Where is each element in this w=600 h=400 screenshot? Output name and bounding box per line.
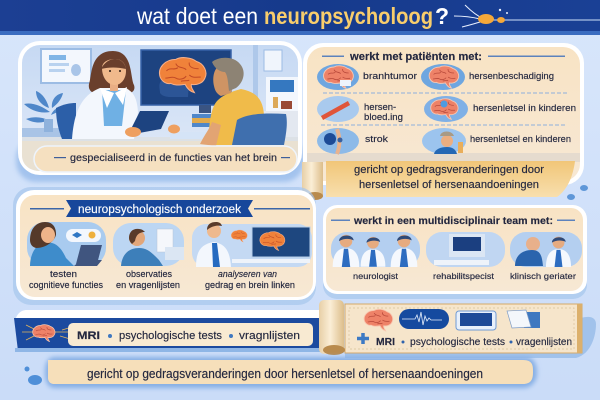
step: cognitive tests xyxy=(27,222,106,290)
banner heading xyxy=(66,200,253,217)
step: analysing behaviour and brain: analyseren van xyxy=(218,269,277,279)
caption: specialised: gespecialiseerd in de functies van het brein xyxy=(70,152,277,164)
scroll banner: focus on behaviour: hersenletsel of hersenaandoeningen xyxy=(359,179,539,191)
scroll: assessment tools xyxy=(319,300,596,358)
scroll banner: focus on behaviour: gericht op gedragsveranderingen door xyxy=(354,164,544,176)
heading: works with patients: werkt met patiënten met: xyxy=(349,51,482,63)
title: wat doet een xyxy=(136,3,258,29)
desk xyxy=(22,137,298,147)
item: brain haemorrhage xyxy=(317,96,403,123)
member: neurologist: neurologist xyxy=(353,271,399,281)
icon: brain xyxy=(364,309,393,331)
title xyxy=(136,3,449,29)
step: analysing behaviour and brain xyxy=(192,222,312,290)
member: rehabilitation specialist: rehabilitspecist xyxy=(433,271,495,281)
panel: multidisciplinary team xyxy=(323,205,587,299)
member: neurologist xyxy=(331,232,420,281)
member: clinical geriatrician xyxy=(510,232,582,281)
item: brain damage xyxy=(421,64,554,90)
icon: plus xyxy=(357,333,369,344)
icon: plant xyxy=(24,91,68,132)
panel: specialised in brain functions xyxy=(16,41,304,182)
icon: papers xyxy=(507,310,540,328)
member: rehabilitation specialist xyxy=(426,232,505,281)
bottom banner: focus statement: gericht op gedragsveranderingen door hersenletsel of hersenaandoeningen xyxy=(87,367,483,381)
header band xyxy=(0,0,600,35)
monitor with brain scan xyxy=(141,50,231,113)
item: brain haemorrhage: bloed.ing xyxy=(364,112,403,123)
icon: brain wave xyxy=(399,309,449,329)
figure: patient xyxy=(200,58,264,146)
illustration: consultation scene xyxy=(22,45,298,171)
member: clinical geriatrician: klinisch geriater xyxy=(510,271,576,281)
banner heading: neuropsychologisch onderzoek xyxy=(78,204,241,216)
step: observations and questionnaires xyxy=(113,223,184,290)
item: injury and children xyxy=(422,128,571,154)
icon: glowing neuron xyxy=(454,5,600,27)
step: cognitive tests: testen xyxy=(50,269,77,279)
figure: neuropsychologist xyxy=(72,51,180,139)
text: methods list: vragnlijsten xyxy=(239,330,300,342)
text: methods list: MRI xyxy=(77,330,100,342)
panel: neuropsychological assessment xyxy=(13,187,316,305)
text: tools list: psychologische tests xyxy=(410,336,505,348)
icon: wired brain xyxy=(22,325,72,342)
item: brain damage: hersenbeschadiging xyxy=(469,71,554,82)
chair: patient xyxy=(232,114,287,145)
text: methods list: psychologische tests xyxy=(119,330,223,342)
icon: scan screen xyxy=(456,311,496,330)
heading: team: werkt in een multidisciplinair team met: xyxy=(353,215,553,227)
title: neuropsycholoog xyxy=(264,3,433,29)
step: cognitive tests: cognitieve functies xyxy=(29,280,103,290)
item: brain tumour xyxy=(317,64,417,90)
chair: doctor xyxy=(56,103,76,139)
text: tools list: vragenlijsten xyxy=(516,337,572,348)
item: brain injury in children: hersenletsel in kinderen xyxy=(473,103,576,114)
bottom banner: focus statement xyxy=(45,357,537,388)
step: observations and questionnaires: en vragenlijsten xyxy=(116,280,180,290)
step: observations and questionnaires: observaties xyxy=(126,269,172,279)
caption: specialised xyxy=(34,146,297,172)
step: analysing behaviour and brain: gedrag en brein linken xyxy=(205,280,295,290)
decoration: paint drops xyxy=(24,185,588,385)
panel: works with patients xyxy=(302,43,584,200)
title: ? xyxy=(435,3,449,29)
item: brain haemorrhage: hersen- xyxy=(364,102,396,113)
item: stroke xyxy=(317,128,388,154)
text: tools list: MRI xyxy=(376,337,395,348)
item: brain injury in children xyxy=(424,96,576,122)
scroll banner: focus on behaviour xyxy=(302,161,575,200)
text: methods list xyxy=(77,330,300,342)
strip: methods xyxy=(14,310,325,352)
text: tools list xyxy=(376,336,572,348)
item: brain tumour: branhtumor xyxy=(363,71,417,82)
item: stroke: strok xyxy=(365,134,388,145)
item: injury and children: hersenletsel en kinderen xyxy=(470,134,571,145)
